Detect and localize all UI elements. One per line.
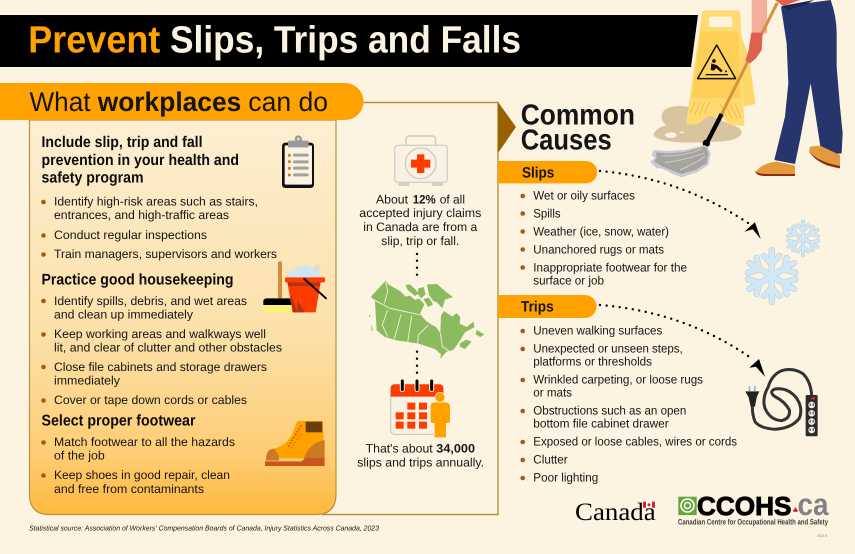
illustration: worker mopping beside wet floor sign (650, 0, 843, 177)
tab: trips (498, 295, 596, 318)
panel: trips list: Clutter (533, 453, 568, 467)
stat: 34,000 slips and trips: slips and trips annually. (357, 456, 484, 470)
section: health and safety program (41, 134, 277, 261)
heading: common causes: Common (521, 99, 635, 131)
section: practice good housekeeping: Practice good housekeeping (42, 272, 234, 289)
glove (745, 33, 763, 63)
panel: trips list: Exposed or loose cables, wires or cords (533, 435, 737, 449)
wet floor sign (686, 10, 755, 126)
section: practice good housekeeping (41, 272, 282, 407)
icon: clipboard (282, 135, 314, 188)
tab: slips: Slips (522, 165, 554, 182)
panel: slips list: Wet or oily surfaces (533, 188, 635, 202)
stat: 12 percent of claims: in Canada are from a (363, 220, 478, 234)
panel: trips list: Unexpected or unseen steps, (533, 342, 683, 356)
section: health and safety program: safety program (42, 170, 144, 187)
panel: slips list (498, 161, 687, 287)
section: health and safety program: Identify high-risk areas such as stairs, (54, 195, 258, 209)
panel: slips list: Spills (533, 206, 561, 220)
dotted connector lower (416, 350, 418, 374)
section: practice good housekeeping: immediately (54, 374, 121, 388)
dotted connector upper (416, 253, 418, 276)
panel: trips list: bottom file cabinet drawer (533, 417, 669, 431)
stat: 12 percent of claims: accepted injury claims (359, 206, 481, 220)
panel: statistics frame (322, 102, 498, 514)
title banner: Slips, Trips and Falls (170, 20, 521, 62)
panel: slips list: surface or job (533, 273, 604, 287)
logo: Canada wordmark: Canada (575, 499, 656, 526)
mop (650, 3, 777, 177)
section: practice good housekeeping: Identify spills, debris, and wet areas (54, 294, 247, 308)
panel: trips list: or mats (533, 386, 572, 400)
icon: snowflakes (748, 222, 818, 302)
icon: map of Canada (369, 281, 484, 359)
section: practice good housekeeping: and clean up immediately (54, 308, 194, 322)
stat: 12 percent of claims: slip, trip or fall. (381, 234, 459, 248)
logo: CCOHS: ca (798, 487, 829, 522)
panel: trips list: Poor lighting (533, 471, 598, 485)
arm and shirt (752, 0, 767, 33)
section: practice good housekeeping: lit, and clear of clutter and other obstacles (54, 341, 282, 355)
stat: 34,000 slips and trips: That's about (366, 442, 433, 456)
heading band: what workplaces can do: can do (248, 87, 328, 117)
stat: 34,000 slips and trips (357, 442, 484, 470)
panel: trips list: Uneven walking surfaces (533, 324, 662, 338)
source note: Statistical source: Association of Workers' Compensation Boards of Canada, Injury Statistics Across Canada, 2023 (29, 524, 379, 533)
section: health and safety program: Conduct regular inspections (54, 228, 207, 242)
heading band: what workplaces can do: workplaces (97, 87, 241, 117)
stat: 12 percent of claims: 12% (413, 192, 436, 206)
title banner (0, 15, 698, 67)
section: practice good housekeeping: Close file cabinets and storage drawers (54, 360, 267, 374)
panel: trips list: platforms or thresholds (533, 355, 652, 369)
arrow: pointer to common causes (498, 102, 516, 153)
stat: 12 percent of claims: of all (440, 192, 465, 206)
section: select proper footwear: Match footwear to all the hazards (54, 435, 235, 449)
logo: CCOHS: CCOHS (697, 491, 792, 521)
document code: 2023-9 (817, 534, 827, 538)
small snowflake (748, 222, 818, 302)
heading band: what workplaces can do (0, 83, 364, 120)
stat: 34,000 slips and trips: 34,000 (436, 442, 475, 456)
tab: trips: Trips (521, 299, 554, 316)
puddle (653, 106, 742, 143)
section: health and safety program: Train managers, supervisors and workers (54, 247, 277, 261)
section: practice good housekeeping: Cover or tape down cords or cables (54, 393, 247, 407)
section: select proper footwear: of the job (54, 449, 105, 463)
section: health and safety program: entrances, and high-traffic areas (54, 208, 229, 222)
stat: 12 percent of claims (359, 192, 481, 248)
title banner: Prevent (28, 20, 161, 62)
section: select proper footwear: Keep shoes in good repair, clean (54, 468, 230, 482)
panel: trips list: Wrinkled carpeting, or loose rugs (533, 373, 703, 387)
heading: common causes (521, 99, 635, 156)
dotted arrow: trips to cord (600, 305, 765, 377)
section: health and safety program: prevention in your health and (42, 152, 239, 169)
heading band: what workplaces can do: What (30, 87, 91, 117)
section: practice good housekeeping: Keep working areas and walkways well (54, 327, 266, 341)
tab: slips (498, 161, 597, 183)
icon: calendar and worker (391, 379, 450, 438)
section: select proper footwear: and free from contaminants (54, 482, 204, 496)
icon: first aid kit (395, 136, 447, 186)
stat: 12 percent of claims: About (376, 192, 409, 206)
section: select proper footwear (41, 413, 235, 496)
panel: trips list: Obstructions such as an open (533, 404, 686, 418)
logo: CCOHS (678, 487, 829, 526)
panel: what workplaces can do (0, 83, 364, 514)
dotted arrow: slips to snowflakes (600, 171, 761, 239)
icon: work boot (265, 421, 325, 466)
panel: trips list (498, 295, 737, 485)
shoes (756, 162, 795, 176)
heading: common causes: Causes (521, 124, 612, 156)
icon: bucket and broom (263, 261, 326, 312)
panel: slips list: Weather (ice, snow, water) (533, 224, 669, 238)
section: health and safety program: Include slip, trip and fall (42, 134, 202, 151)
trousers (774, 0, 843, 164)
large snowflake (748, 250, 795, 302)
panel: slips list: Inappropriate footwear for the (533, 260, 687, 274)
icon: extension cord (745, 370, 818, 436)
panel: slips list: Unanchored rugs or mats (533, 242, 664, 256)
section: select proper footwear: Select proper footwear (42, 413, 196, 430)
